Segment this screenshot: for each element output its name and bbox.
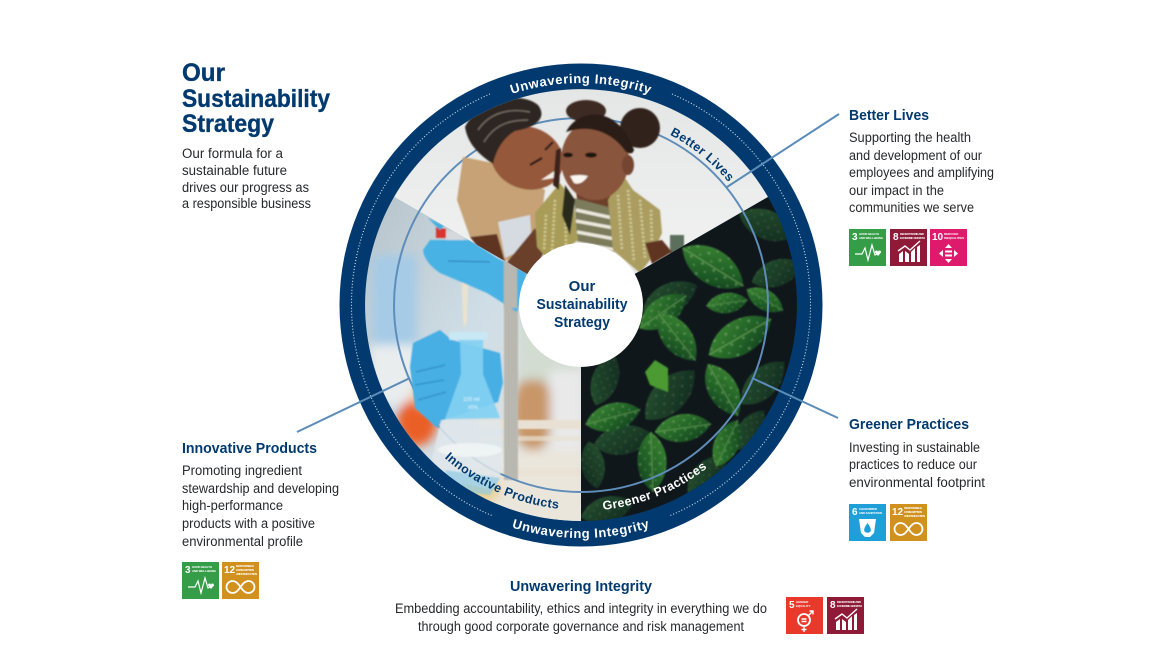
arrow: better lives leader line xyxy=(727,114,839,187)
panel: better lives xyxy=(849,107,994,266)
flask volume markings: 125 ml xyxy=(463,397,480,403)
icon: SDG 3: 3 xyxy=(185,565,191,576)
woman arm xyxy=(470,233,506,262)
icon: SDG 8: ECONOMIC GROWTH xyxy=(900,236,925,240)
woman hand xyxy=(506,228,544,274)
cheek of woman touching child xyxy=(553,148,561,190)
icon: SDG 8: DECENT WORK AND xyxy=(900,232,924,236)
center hub: Strategy xyxy=(554,314,611,331)
text: innovative products description: stewardship and developing xyxy=(182,481,339,496)
icon: SDG 10 xyxy=(930,229,967,266)
panel: greener practices xyxy=(849,416,985,541)
title: Sustainability xyxy=(182,85,330,113)
text: greener practices description xyxy=(849,440,985,490)
intro text: Our formula for a xyxy=(182,146,283,161)
icon: SDG 12: RESPONSIBLE xyxy=(236,564,254,568)
icon: SDG 6: 6 xyxy=(852,507,858,518)
icon: SDG 12 xyxy=(222,562,259,599)
child smile xyxy=(570,175,588,184)
ring label: unwavering integrity bottom: Unwavering Integrity xyxy=(513,519,648,541)
icon: SDG 3: AND WELL-BEING xyxy=(192,569,217,573)
text: better lives description: communities we serve xyxy=(849,200,974,215)
panel: innovative products xyxy=(182,440,339,599)
text: greener practices description: practices to reduce our xyxy=(849,457,977,472)
icon: SDG 6 xyxy=(849,504,886,541)
photo sector: laboratory, innovative products xyxy=(360,190,585,525)
icon: SDG 12 xyxy=(890,504,927,541)
arrow: greener practices leader line xyxy=(752,378,838,418)
title: Our xyxy=(182,59,225,87)
woman smile and eyes xyxy=(541,170,556,180)
flask held in glove xyxy=(445,333,500,419)
text: better lives description: Supporting the health xyxy=(849,130,971,145)
woman face xyxy=(492,126,563,190)
text: innovative products description: Promoting ingredient xyxy=(182,463,302,478)
icon: SDG 10: 10 xyxy=(932,232,944,243)
text: innovative products description: environmental profile xyxy=(182,534,303,549)
child right scarf xyxy=(608,175,662,273)
icon: SDG 3: GOOD HEALTH xyxy=(192,565,212,569)
icon: SDG 10: INEQUALITIES xyxy=(944,236,964,240)
sector label: innovative products: Innovative Products xyxy=(445,452,558,508)
flask volume markings: ±5% xyxy=(468,405,479,411)
child left scarf xyxy=(535,183,578,262)
heading: unwavering integrity: Unwavering Integrity xyxy=(510,578,653,595)
panel: unwavering integrity xyxy=(395,578,864,634)
text: better lives description: and development of our xyxy=(849,148,982,163)
woman undershirt xyxy=(498,215,532,258)
child striped shirt xyxy=(574,198,616,252)
child ear xyxy=(622,155,634,175)
intro text: sustainable future xyxy=(182,163,287,178)
text: unwavering integrity description: Embedding accountability, ethics and integrity in everything we do xyxy=(395,601,767,616)
icon: SDG 12: 12 xyxy=(224,565,236,576)
text: innovative products description: products with a positive xyxy=(182,516,315,531)
pipette xyxy=(461,282,470,326)
icon: SDG 12: CONSUMPTION xyxy=(904,510,922,514)
text: unwavering integrity description xyxy=(395,601,767,634)
icon: SDG 12: 12 xyxy=(892,507,904,518)
center hub: Our xyxy=(569,278,595,295)
icon: SDG 8: 8 xyxy=(830,600,836,611)
icon: SDG 12: RESPONSIBLE xyxy=(904,506,922,510)
lab stand pillar xyxy=(504,255,518,480)
photo sector: leaves background, greener practices xyxy=(581,197,797,521)
icon: SDG 3: AND WELL-BEING xyxy=(859,236,884,240)
flask volume markings xyxy=(463,397,480,411)
lab shelf bars xyxy=(500,419,581,442)
dotted ring left xyxy=(351,94,493,516)
icon: SDG 12: AND PRODUCTION xyxy=(904,514,925,518)
icon: SDG 8: ECONOMIC GROWTH xyxy=(837,604,862,608)
child face xyxy=(561,120,629,200)
upper blue glove xyxy=(423,240,527,312)
child hair xyxy=(566,114,634,153)
icon: SDG 3 xyxy=(849,229,886,266)
intro text: drives our progress as xyxy=(182,180,309,195)
title: Strategy xyxy=(182,110,274,138)
icon: SDG 5 xyxy=(786,597,823,634)
text: better lives description: employees and amplifying xyxy=(849,165,994,180)
photo foreground: woman and child xyxy=(457,98,672,280)
icon: SDG 8: 8 xyxy=(893,232,899,243)
child arm xyxy=(645,240,672,264)
icon: SDG 3: 3 xyxy=(852,232,858,243)
center hub: Sustainability xyxy=(536,296,628,313)
icon: SDG 6: CLEAN WATER xyxy=(859,507,878,511)
heading: innovative products: Innovative Products xyxy=(182,440,317,457)
dropper bottle cap xyxy=(436,227,446,238)
icon: SDG 3: GOOD HEALTH xyxy=(859,232,879,236)
heading: greener practices: Greener Practices xyxy=(849,416,969,433)
woman hair xyxy=(465,98,541,164)
icon: SDG 12: CONSUMPTION xyxy=(236,568,254,572)
sector label: greener practices: Greener Practices xyxy=(603,464,706,510)
lower beaker xyxy=(432,420,503,490)
icon: SDG 5: EQUALITY xyxy=(796,604,811,608)
text: innovative products description xyxy=(182,463,339,549)
icon: SDG 8: DECENT WORK AND xyxy=(837,600,861,604)
title xyxy=(182,59,330,138)
outer navy ring xyxy=(340,64,822,546)
icon: SDG 5: 5 xyxy=(789,600,795,611)
icon: SDG 6: AND SANITATION xyxy=(859,511,882,515)
icon: SDG 10: REDUCED xyxy=(944,232,958,236)
text: innovative products description: high-performance xyxy=(182,498,283,513)
photo sector: sky background, better lives xyxy=(394,89,768,274)
icon: SDG 3 xyxy=(182,562,219,599)
text: greener practices description: environmental footprint xyxy=(849,475,985,490)
panel: sustainability wheel xyxy=(340,64,822,546)
heading: better lives: Better Lives xyxy=(849,107,929,124)
child hair buns xyxy=(566,100,606,122)
icon: SDG 12: AND PRODUCTION xyxy=(236,572,257,576)
dotted ring right xyxy=(669,94,811,516)
text: better lives description: our impact in the xyxy=(849,183,944,198)
child neck xyxy=(575,192,612,208)
text: greener practices description: Investing in sustainable xyxy=(849,440,980,455)
sector label: better lives: Better Lives xyxy=(670,128,732,181)
intro text: a responsible business xyxy=(182,196,311,211)
child eyes xyxy=(563,153,573,157)
center hub xyxy=(519,243,643,367)
ring label: unwavering integrity top: Unwavering Integrity xyxy=(510,74,652,95)
icon: SDG 5: GENDER xyxy=(796,600,809,604)
lab stand overlap xyxy=(504,262,517,308)
lower blue glove xyxy=(410,330,503,428)
icon: SDG 8 xyxy=(890,229,927,266)
text: better lives description xyxy=(849,130,994,215)
thin inner ring xyxy=(394,118,768,492)
woman shirt xyxy=(457,157,545,262)
arrow: innovative products leader line xyxy=(297,378,410,432)
icon: SDG 8 xyxy=(827,597,864,634)
text: unwavering integrity description: through good corporate governance and risk management xyxy=(418,619,744,634)
photo foreground: gloves and flasks xyxy=(410,218,527,495)
intro text xyxy=(182,146,311,211)
